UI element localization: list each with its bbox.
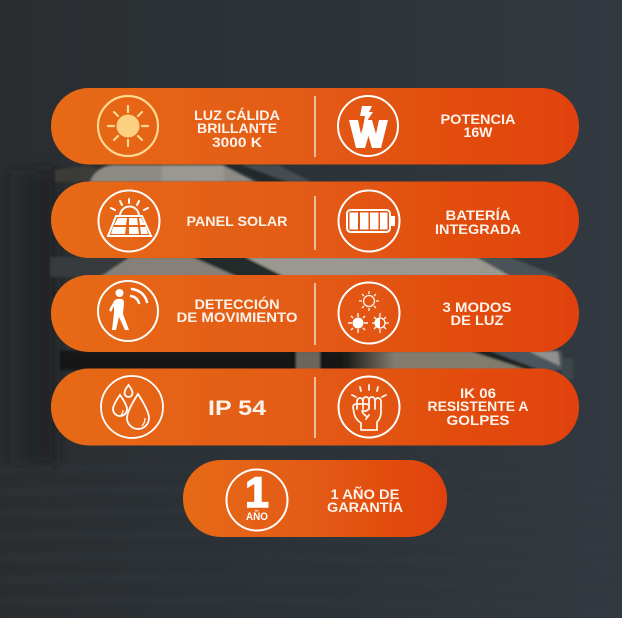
label: garantía (327, 487, 403, 515)
label: modos: 3 MODOS (442, 300, 512, 315)
label: modos: DE LUZ (450, 313, 504, 328)
label: batería: INTEGRADA (435, 222, 521, 237)
label: detección: DE MOVIMIENTO (176, 310, 298, 325)
label: batería (435, 208, 521, 237)
label: luz cálida: 3000 K (212, 135, 262, 150)
pill: detección / modos (51, 275, 579, 352)
icon: motion detection (98, 281, 158, 341)
label: IK 06 (428, 386, 529, 428)
label: modos (442, 300, 512, 328)
divider (314, 377, 316, 438)
icon: fist (338, 376, 400, 438)
label: batería: BATERÍA (446, 208, 511, 223)
icon: battery (338, 190, 400, 252)
divider (314, 196, 316, 250)
wall lamp behind the pills (50, 165, 573, 379)
icon: three light modes (338, 282, 400, 344)
label: IP 54: IP 54 (208, 397, 266, 420)
icon: sun (98, 96, 158, 156)
label: luz cálida (194, 108, 280, 150)
label: IK 06: GOLPES (446, 413, 510, 428)
divider (314, 283, 316, 345)
icon: 1 año badge: 1 (245, 469, 269, 517)
label: IK 06: RESISTENTE A (428, 399, 529, 414)
label: IK 06: IK 06 (460, 386, 497, 401)
icon: 1 año badge: AÑO (246, 510, 268, 523)
icon: 1 año badge (226, 469, 288, 530)
pill: luz cálida / potencia (51, 88, 579, 164)
pill: panel solar / batería (51, 182, 579, 258)
label: detección: DETECCIÓN (194, 297, 280, 312)
label: potencia: 16W (464, 125, 493, 140)
label: luz cálida: LUZ CÁLIDA (194, 108, 280, 123)
pill: IP54 / IK06 (51, 368, 579, 446)
icon: solar panel (98, 190, 160, 252)
icon: water drops (101, 376, 163, 438)
pill: garantía (183, 460, 447, 537)
label: detección (176, 297, 298, 325)
label: potencia: POTENCIA (440, 112, 516, 127)
label: garantía: 1 AÑO DE (330, 487, 400, 502)
label: luz cálida: BRILLANTE (197, 121, 277, 136)
label: panel solar: PANEL SOLAR (186, 214, 288, 229)
label: garantía: GARANTÍA (327, 500, 403, 515)
label: potencia (440, 112, 516, 140)
divider (314, 96, 316, 157)
icon: power W (338, 96, 398, 156)
